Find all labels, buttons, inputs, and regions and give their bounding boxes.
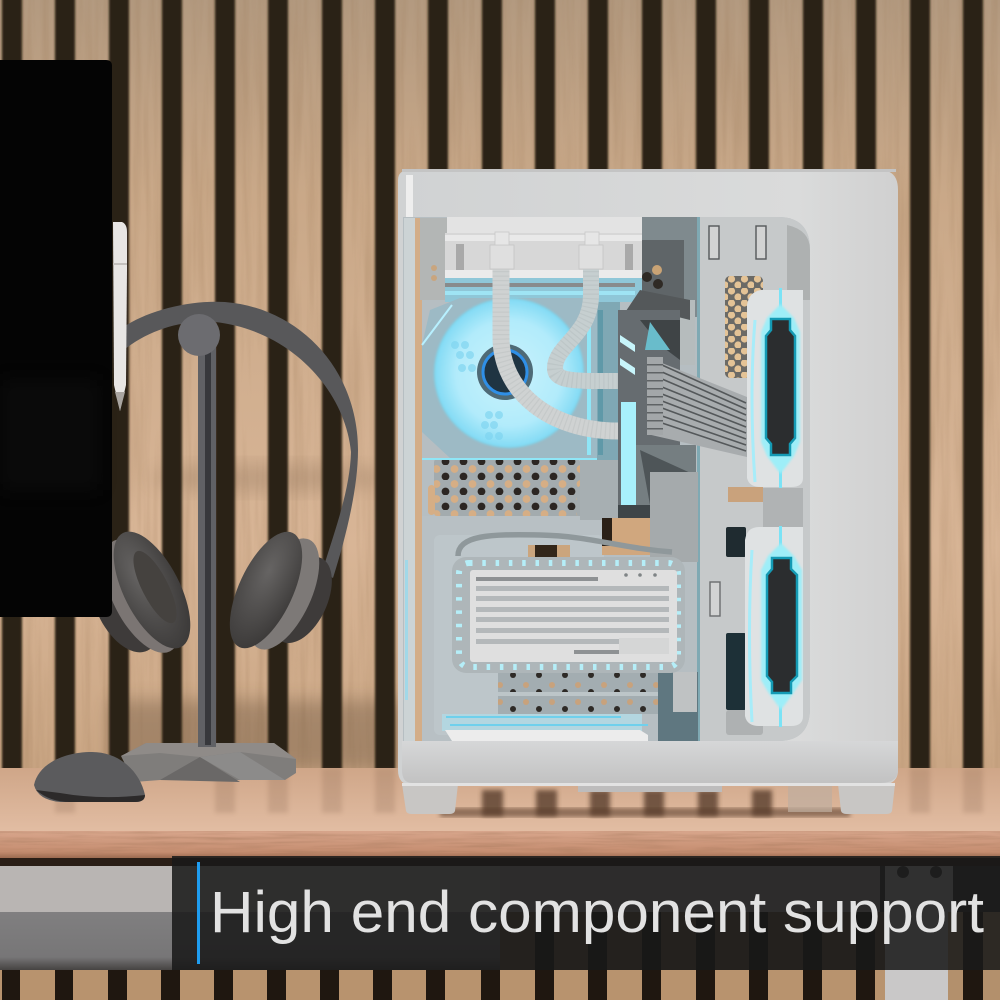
power supply at bottom — [442, 714, 648, 741]
accent line — [197, 862, 200, 964]
fan hub — [477, 344, 533, 400]
case cable — [458, 535, 672, 556]
teal panel beside fan — [590, 300, 620, 460]
stand pole — [198, 345, 216, 747]
PC case — [398, 169, 898, 814]
desk — [0, 768, 1000, 861]
graphics card — [452, 557, 685, 673]
divider pillar — [698, 217, 726, 741]
desk top surface — [0, 768, 1000, 832]
cooling fan — [422, 298, 597, 460]
tube fittings — [490, 245, 514, 269]
slats behind the caption — [500, 912, 885, 970]
side slots — [428, 485, 435, 515]
caption bar — [172, 856, 1000, 970]
coolant tubes — [490, 232, 618, 431]
window interior — [403, 217, 810, 741]
tube 2 — [555, 262, 618, 381]
caption background — [172, 856, 1000, 970]
GPU mount dark section — [618, 310, 696, 520]
case feet — [402, 784, 895, 814]
desk legs and frame — [0, 858, 1000, 1000]
slat reflections under case — [482, 790, 772, 816]
top glass highlight — [406, 175, 413, 217]
tube 1 — [501, 262, 618, 431]
cyan light strip — [621, 402, 636, 506]
stand base — [121, 743, 296, 782]
headband — [125, 302, 358, 578]
mesh holes panel — [725, 276, 763, 378]
case shadow on desk — [440, 808, 850, 817]
back plate lower — [422, 516, 604, 741]
bottom band — [402, 741, 898, 783]
lower side fan — [745, 526, 803, 727]
knob on stand — [178, 314, 220, 356]
glass edge with wood showing — [404, 218, 415, 741]
wood gap under GPU mount — [602, 518, 652, 555]
left ear cup — [77, 520, 206, 664]
central dark cable chamber — [620, 217, 700, 365]
right ear cup — [215, 521, 344, 660]
right desk leg — [880, 866, 1000, 912]
faint wall reflections on desk — [55, 768, 983, 813]
radiator on top — [445, 217, 647, 302]
lower slats — [0, 970, 1000, 1000]
lower cable cutouts — [726, 527, 746, 557]
wood slat wall — [0, 0, 1000, 785]
wood gap between fans — [728, 487, 763, 502]
lower slots — [498, 672, 658, 692]
rear exhaust hex vent — [434, 459, 580, 516]
caption text: High end component support — [210, 880, 984, 945]
upper side fan — [747, 288, 803, 488]
headphones stand — [121, 345, 296, 782]
monitor — [0, 60, 112, 617]
mouse — [34, 752, 145, 802]
stylus pen — [113, 222, 127, 411]
headphones — [77, 302, 358, 664]
right compartment back panel — [700, 217, 810, 741]
desk front edge — [0, 831, 1000, 861]
flat cable bundle — [647, 357, 747, 457]
left wall strip — [420, 218, 447, 300]
case shell — [398, 170, 898, 785]
